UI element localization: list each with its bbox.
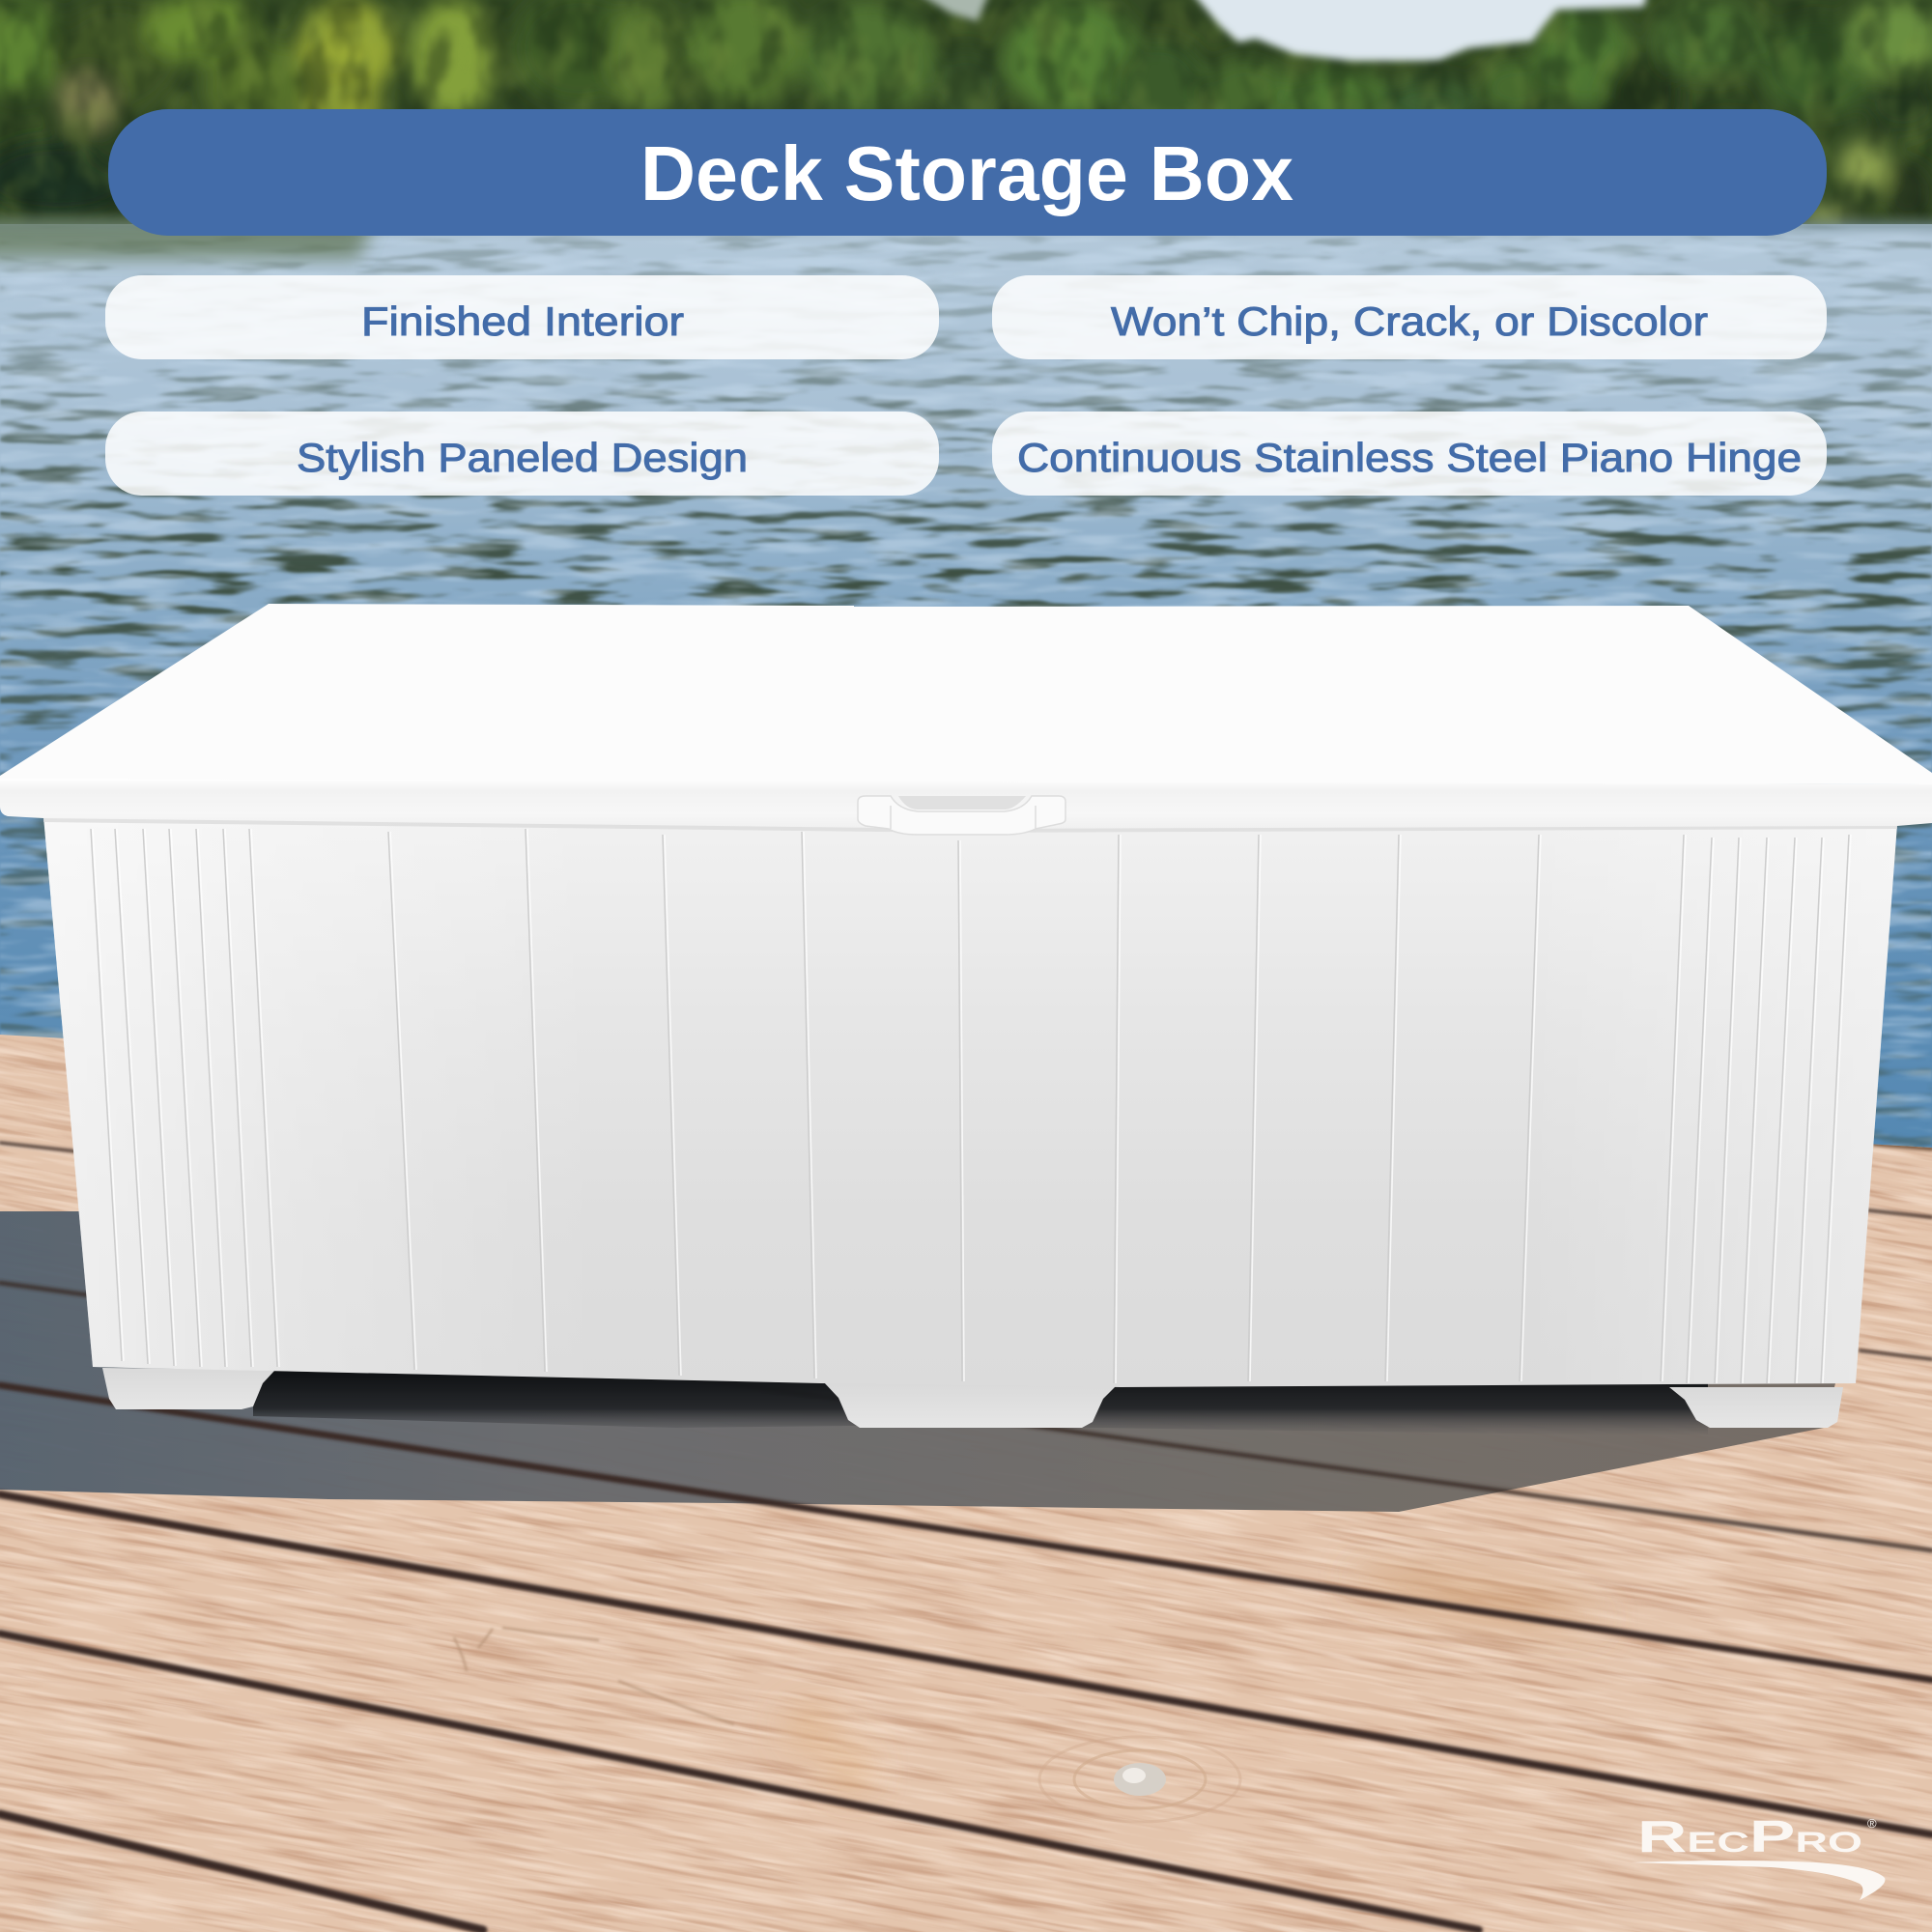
storage box	[0, 604, 1932, 1435]
cracks in plank	[454, 1628, 734, 1724]
background: lake water	[0, 211, 1932, 1151]
wood knot	[1039, 1737, 1240, 1822]
box front panel	[43, 816, 1897, 1387]
background: wooden dock	[0, 1024, 1932, 1932]
lid top surface	[0, 604, 1932, 784]
logo wordmark: R EC P RO	[1637, 1811, 1862, 1861]
foot: centre	[823, 1381, 1117, 1428]
cast shadow of the box	[0, 1211, 1835, 1512]
shoreline reflection	[0, 218, 377, 259]
title banner	[108, 109, 1827, 236]
pale patch bottom left	[43, 1896, 101, 1919]
logo swoosh	[1631, 1861, 1885, 1900]
title text: Deck Storage Box	[640, 130, 1293, 216]
registered mark: ®	[1867, 1816, 1877, 1831]
RecPro logo	[1631, 1811, 1885, 1900]
lid front edge	[0, 779, 1932, 829]
feature pill: Stylish Paneled Design	[105, 412, 939, 496]
background: sky gap	[1190, 0, 1648, 61]
dark gap beneath box	[253, 1367, 1708, 1435]
panel grooves	[91, 829, 1851, 1383]
feature pill: Continuous Stainless Steel Piano Hinge	[992, 412, 1827, 496]
stain marks on planks	[790, 1562, 1605, 1787]
feature pill: Finished Interior: Finished Interior	[361, 298, 684, 344]
feature pill: Continuous Stainless Steel Piano Hinge: Continuous Stainless Steel Piano Hinge	[1017, 435, 1802, 480]
feature pill: Won't Chip, Crack, or Discolor	[992, 275, 1827, 359]
wood grain texture	[0, 1024, 1932, 1932]
foot: left	[102, 1368, 275, 1409]
background: sky sliver behind trees	[913, 0, 990, 21]
latch handle	[858, 796, 1065, 835]
foot: right	[1669, 1387, 1843, 1428]
shoreline blend	[0, 211, 1932, 243]
lid underside shadow	[43, 818, 1897, 833]
wood grain highlights	[0, 1024, 1932, 1932]
feature pill: Stylish Paneled Design: Stylish Paneled Design	[297, 435, 748, 480]
background: tree line	[0, 0, 1932, 232]
feature pill: Won't Chip, Crack, or Discolor: Won’t Chip, Crack, or Discolor	[1111, 298, 1708, 344]
feature pill: Finished Interior	[105, 275, 939, 359]
plank seams	[0, 1143, 1932, 1930]
dock planks base colour	[0, 1024, 1932, 1932]
